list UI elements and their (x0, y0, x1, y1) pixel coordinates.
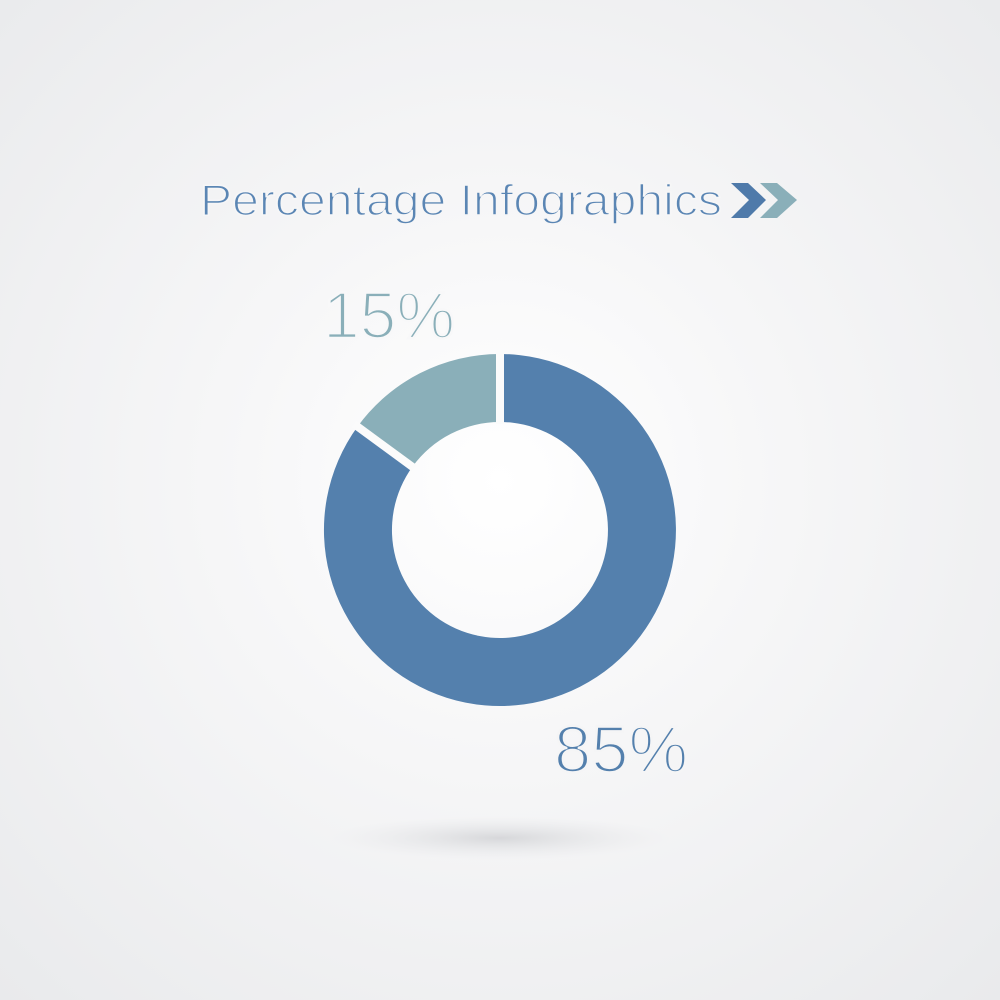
donut chart (324, 350, 676, 706)
title: Percentage Infographics (200, 176, 722, 225)
label: 15%: 15% (323, 278, 455, 352)
label: 85%: 85% (554, 712, 688, 786)
shadow (330, 816, 670, 860)
icon: chevrons (731, 183, 797, 218)
